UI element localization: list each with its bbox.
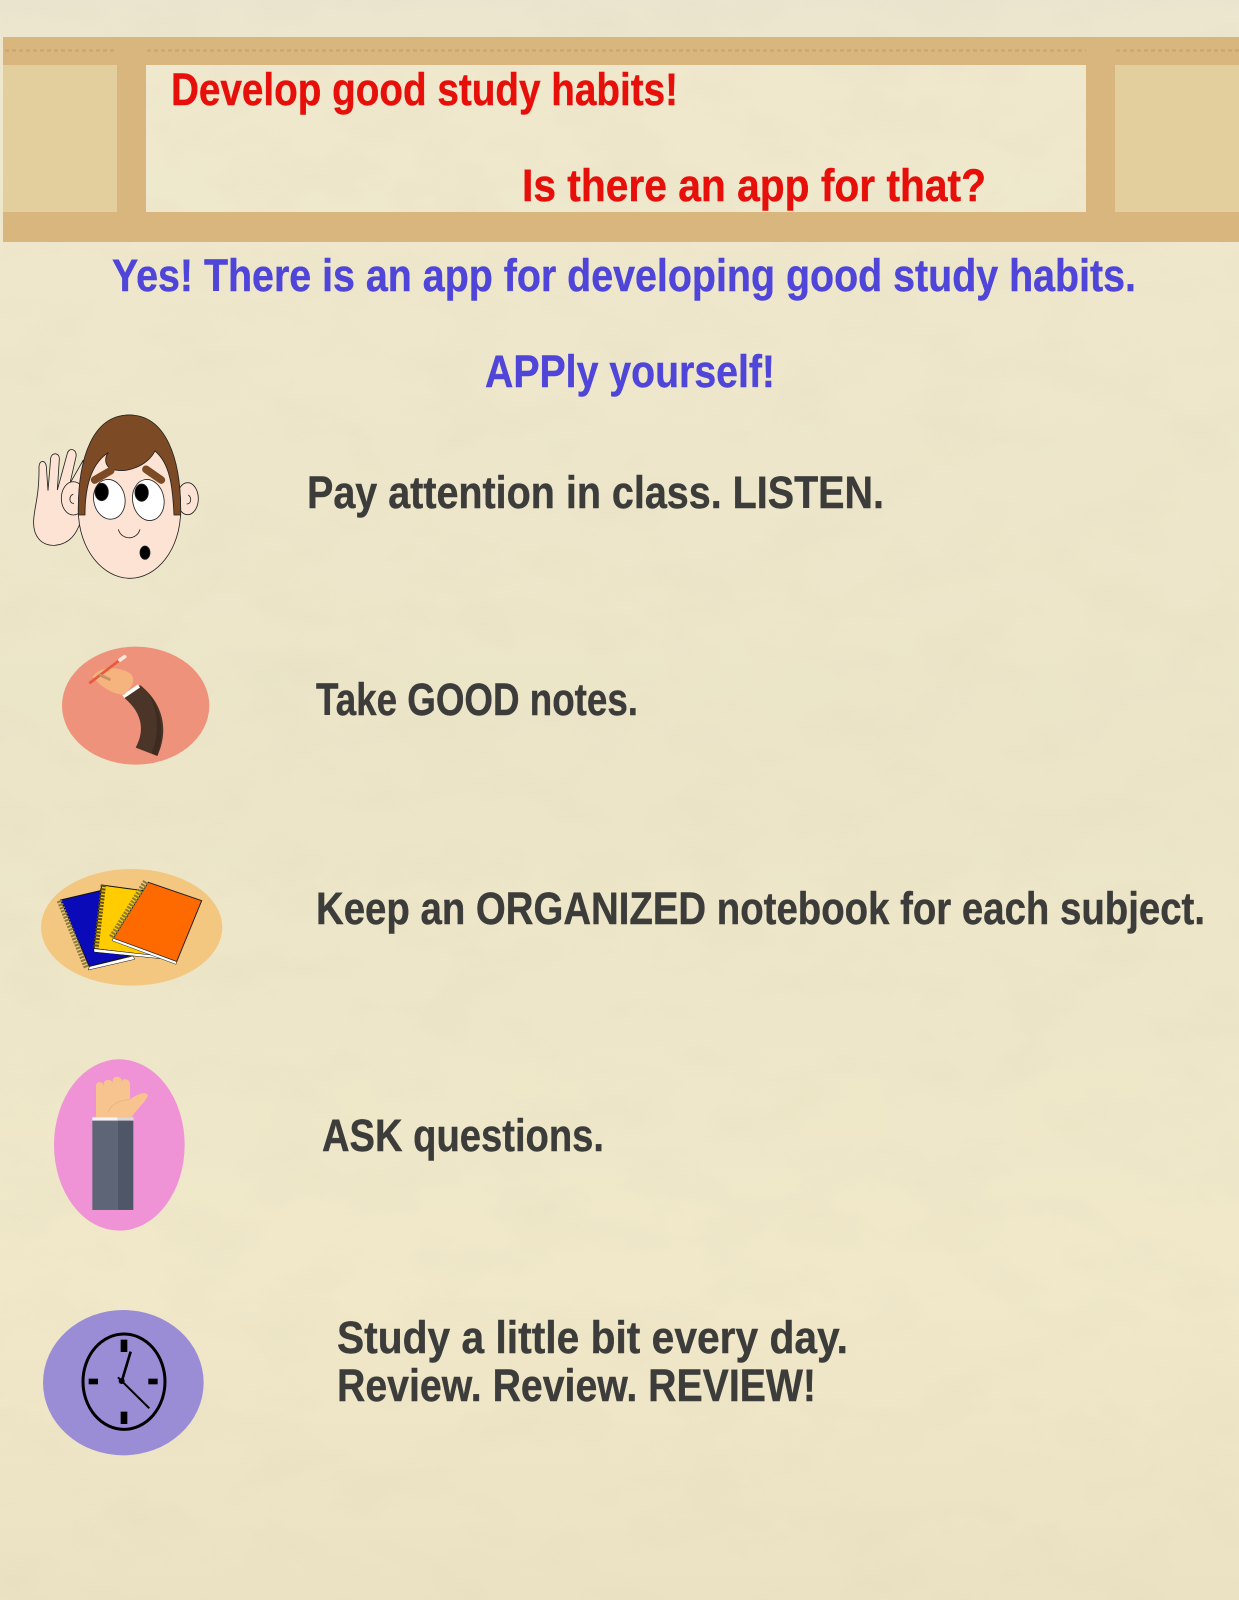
icon: hand writing with pencil	[62, 647, 209, 765]
text: review review review: Review. Review. REVIEW!	[337, 1360, 816, 1411]
text: pay attention: Pay attention in class. LISTEN.	[307, 467, 884, 518]
icon: three notebooks	[41, 869, 222, 986]
icon: listening face	[34, 415, 198, 578]
text: ask questions: ASK questions.	[322, 1110, 604, 1161]
icon: raised hand	[54, 1059, 185, 1231]
text: take good notes: Take GOOD notes.	[316, 674, 638, 725]
text: study a little bit: Study a little bit every day.	[337, 1312, 848, 1363]
title: is there an app for that: Is there an app for that?	[522, 160, 986, 211]
title: develop good study habits: Develop good study habits!	[171, 64, 678, 115]
icon: clock	[43, 1310, 204, 1455]
header banner	[3, 37, 1239, 242]
subtitle: apply yourself: APPly yourself!	[485, 346, 775, 397]
